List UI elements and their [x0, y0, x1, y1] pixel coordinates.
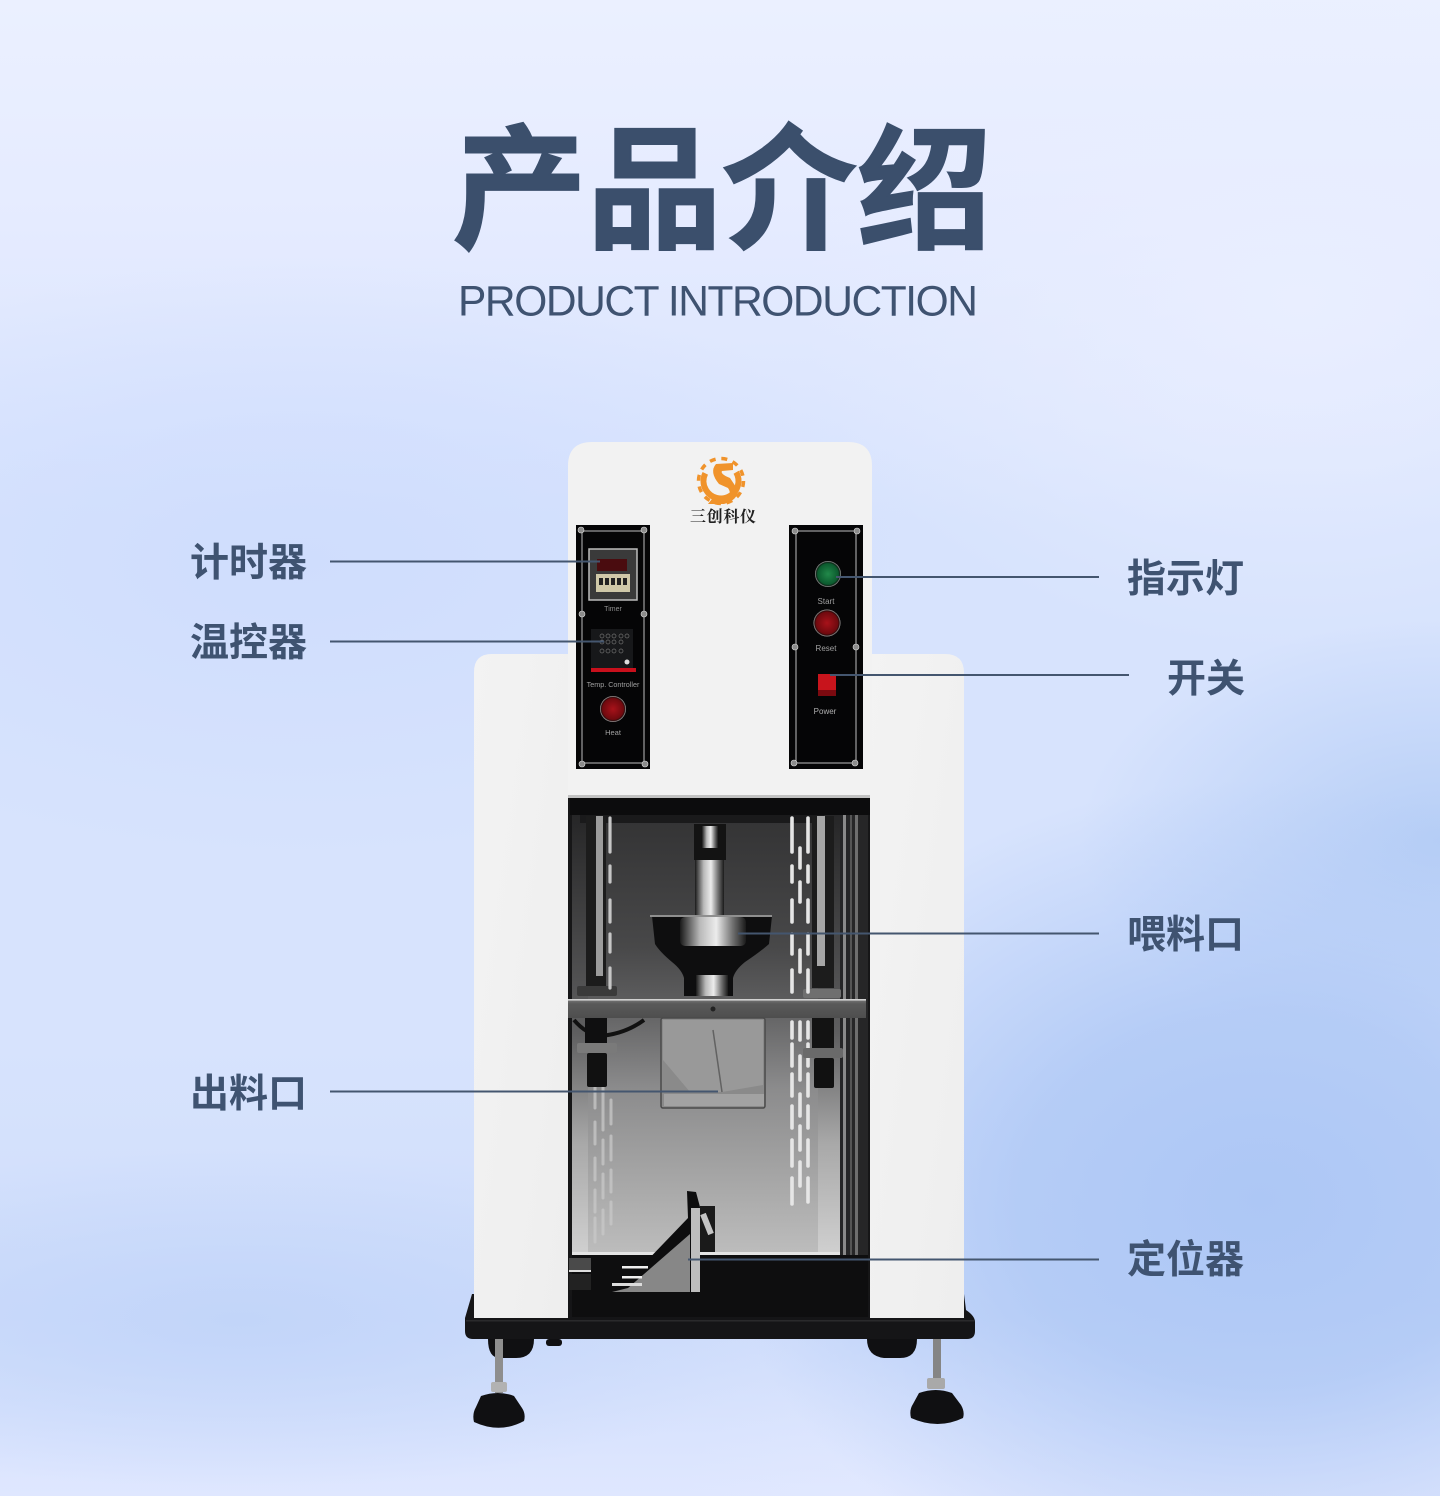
chute: discharge port	[661, 1018, 765, 1108]
leader lines	[330, 562, 1129, 1260]
back panel bottom	[572, 1252, 840, 1255]
chamber	[568, 796, 870, 1317]
reset button	[814, 610, 840, 653]
spindle	[694, 824, 726, 860]
side column left	[474, 654, 568, 1318]
left control panel	[576, 525, 650, 769]
top housing	[568, 442, 872, 798]
logo: 三创科仪	[690, 507, 756, 526]
subtitle: PRODUCT INTRODUCTION	[458, 278, 978, 326]
timer	[589, 549, 637, 613]
logo	[690, 457, 756, 526]
upper rods	[586, 816, 606, 988]
label: feed port: 喂料口	[1127, 914, 1244, 957]
funnel: feed port	[650, 915, 772, 996]
right control panel	[789, 525, 863, 769]
label: discharge port: 出料口	[190, 1073, 307, 1116]
heat lamp	[600, 696, 626, 737]
base plate	[465, 1294, 975, 1428]
power switch: Power	[814, 707, 837, 716]
feet	[473, 1339, 964, 1428]
heat lamp: Heat	[605, 728, 622, 737]
start indicator	[815, 561, 841, 606]
start indicator: Start	[818, 597, 835, 606]
temperature controller: Temp. Controller	[587, 680, 640, 689]
label: locator: 定位器	[1127, 1239, 1244, 1282]
machine	[465, 442, 975, 1428]
timer: Timer	[604, 606, 622, 613]
lower rods	[574, 1020, 644, 1036]
label: indicator light: 指示灯	[1127, 558, 1244, 601]
locator bracket	[569, 1191, 715, 1292]
shelf	[568, 999, 866, 1018]
perforated slots	[595, 818, 808, 1242]
label: timer: 计时器	[190, 542, 307, 585]
label: temperature controller: 温控器	[190, 622, 307, 665]
side column right	[870, 654, 964, 1318]
back-panel flanges	[572, 815, 588, 1252]
power switch	[814, 674, 837, 716]
reset button: Reset	[816, 644, 837, 653]
label: switch: 开关	[1167, 658, 1245, 701]
temperature controller	[587, 629, 640, 689]
title: 产品介绍	[452, 116, 992, 267]
